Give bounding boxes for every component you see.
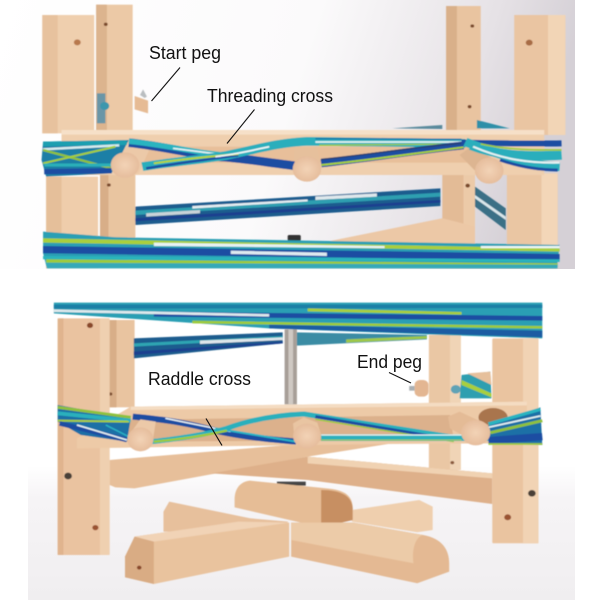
left bundle [58,405,131,442]
strand C [321,145,463,163]
rear right post [442,6,481,247]
peg left [127,419,156,451]
base: front right leg [291,523,449,583]
rear posts [106,320,461,470]
base: rear legs [163,500,433,533]
front right post [507,15,565,268]
peg right [448,412,490,445]
leader line: threading cross [227,110,254,144]
peg middle [293,147,321,182]
left bundle [42,140,129,177]
end peg [409,372,492,398]
base: center block [235,481,353,527]
label: end peg: End peg [357,352,422,372]
leader line: raddle cross [206,418,222,446]
rear bar yarn peek [477,120,510,128]
label: start peg: Start peg [149,43,221,63]
center pole [285,329,297,404]
peg right [460,147,503,184]
label: raddle cross: Raddle cross [148,369,251,389]
front left post [42,15,98,268]
panel: threading cross photo [0,0,575,269]
lower rear yarn band [135,187,506,230]
background [0,0,575,269]
yarn threading cross [42,139,562,177]
leader line: start peg [152,68,180,101]
leader line: end peg [389,372,411,383]
front bar [62,130,544,175]
diagonal base beam [327,218,475,247]
start peg [97,89,148,123]
right bundle [488,407,542,445]
rear yarn band [134,332,427,358]
yarn raddle cross [58,405,542,445]
label: threading cross: Threading cross [207,86,333,106]
strand A [129,143,294,166]
strand B [152,414,450,442]
front bar [77,402,527,448]
front left post [58,318,110,555]
front right post [492,338,538,543]
right bundle [462,134,562,153]
background [28,302,575,600]
peg left [111,144,149,178]
peg end caps over yarn [111,152,503,184]
base: front left leg [125,522,289,584]
strand B [142,141,465,167]
rear left post [96,5,135,238]
pivot knob [288,235,301,241]
cross braces [110,443,492,504]
panel: raddle cross photo [28,302,575,600]
strand A [133,417,296,442]
strand C [321,428,538,448]
peg middle [293,417,321,448]
top yarn band [54,303,542,338]
lower front yarn band [43,232,560,268]
